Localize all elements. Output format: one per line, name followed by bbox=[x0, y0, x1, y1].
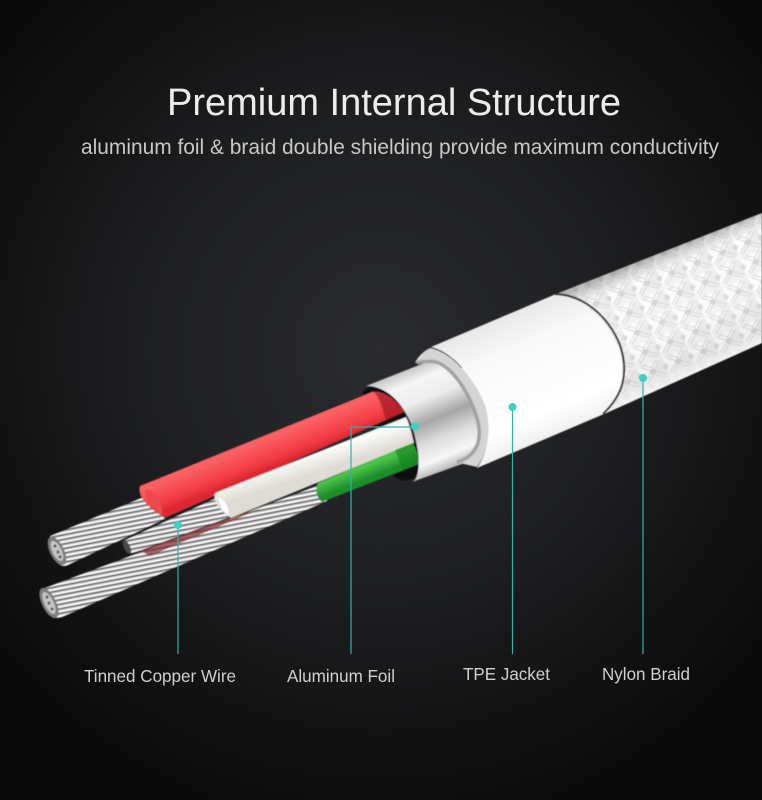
callout: tinned copper wire: Tinned Copper Wire bbox=[84, 666, 236, 686]
cable illustration bbox=[35, 213, 762, 621]
white insulated wire bbox=[214, 417, 414, 518]
TPE jacket bbox=[431, 294, 623, 468]
callout: nylon braid bbox=[602, 374, 690, 684]
red insulated wire bbox=[139, 392, 404, 518]
jacket inner edge bbox=[417, 361, 479, 462]
jacket end face bbox=[415, 348, 488, 467]
callout: TPE jacket bbox=[463, 403, 550, 684]
title: Premium Internal Structure bbox=[167, 82, 621, 124]
callout: aluminum foil: Aluminum Foil bbox=[287, 666, 395, 686]
jacket and braid seam bbox=[553, 294, 624, 414]
tube opening interior bbox=[363, 386, 419, 480]
nylon braid bbox=[556, 213, 762, 414]
tinned copper wire: middle strand bbox=[121, 497, 230, 555]
callout: TPE jacket: TPE Jacket bbox=[463, 664, 550, 684]
green insulated wire bbox=[316, 443, 419, 502]
callout: nylon braid: Nylon Braid bbox=[602, 664, 690, 684]
callout: aluminum foil bbox=[287, 422, 419, 686]
tinned copper wire: lower long strand bbox=[35, 484, 327, 621]
callout: tinned copper wire bbox=[84, 521, 236, 686]
tinned copper wire: upper strand bbox=[44, 496, 165, 568]
subtitle: aluminum foil & braid double shielding provide maximum conductivity bbox=[81, 136, 719, 159]
aluminum foil tube bbox=[366, 360, 490, 482]
